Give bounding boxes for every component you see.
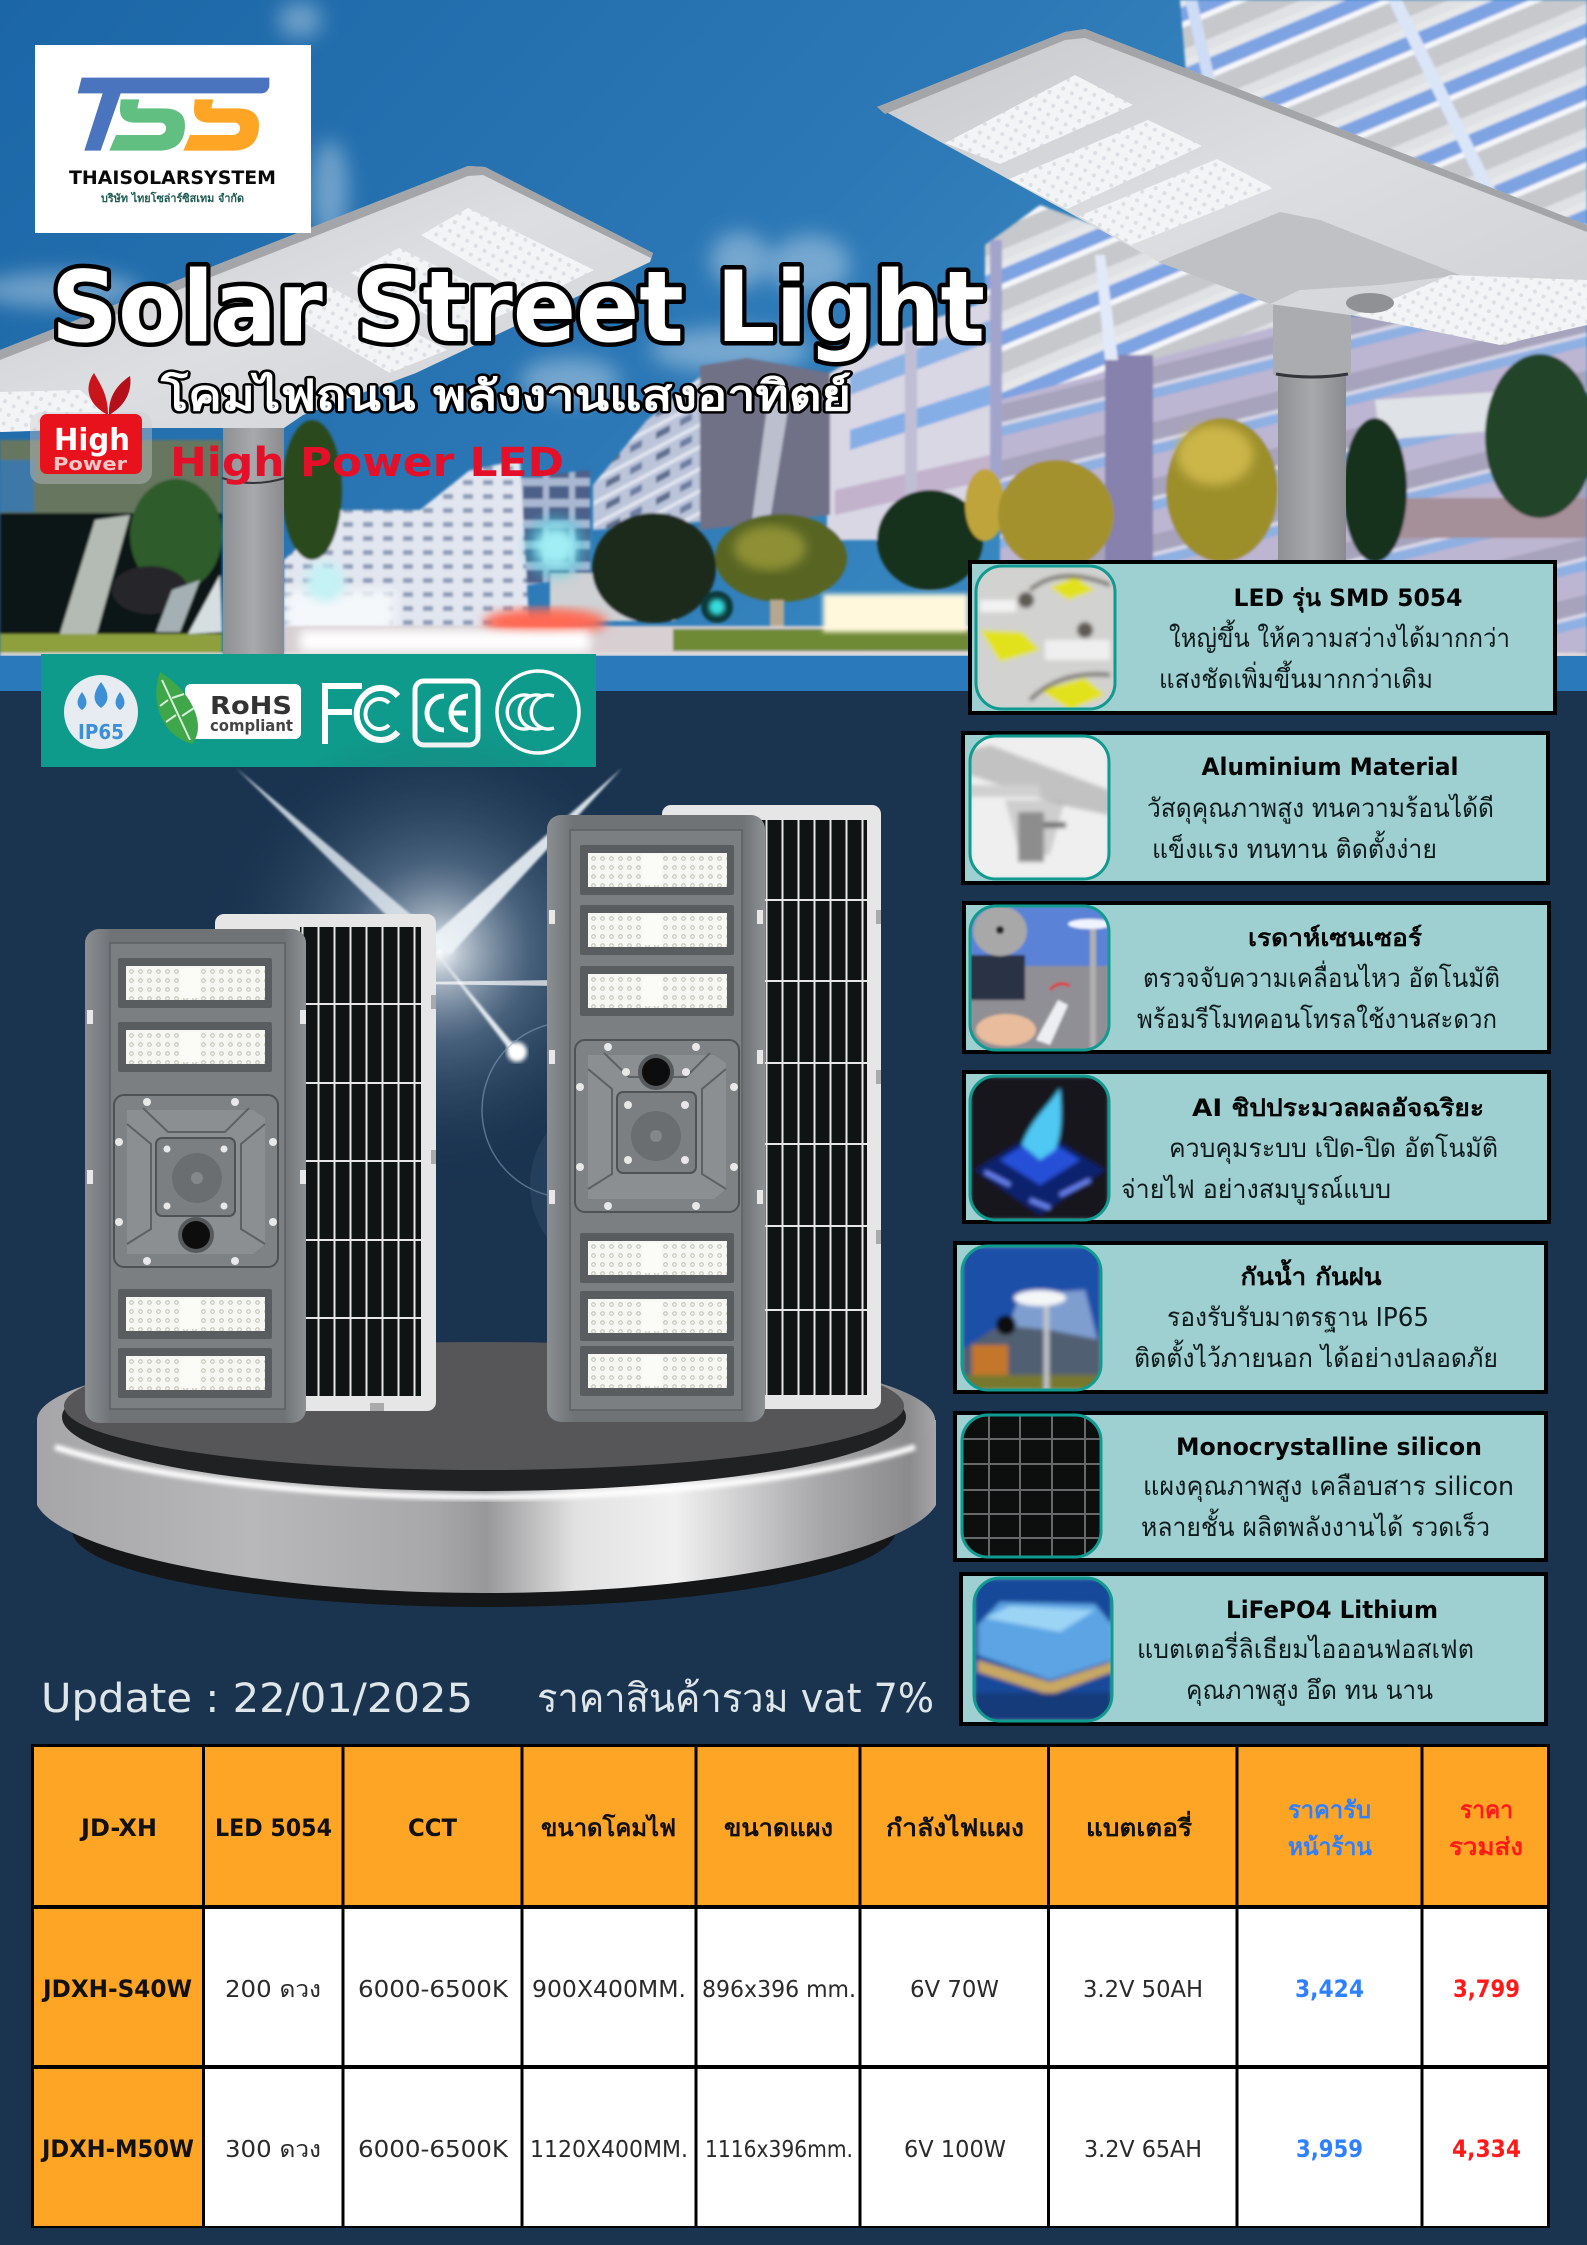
balcony building left of tower — [827, 240, 1002, 540]
table row: JDXH-S40W — [41, 1975, 1520, 2003]
table row: JDXH-M50W: 6000-6500K — [358, 2137, 509, 2163]
badge word high: High — [54, 423, 130, 458]
icon: ce mark — [415, 681, 478, 745]
thumbnail: solar cell grid — [962, 1415, 1101, 1557]
icon: ccc mark — [497, 671, 579, 753]
logo company name: THAISOLARSYSTEM — [69, 167, 276, 189]
upper tower behind right lamp — [1180, 0, 1587, 240]
feature line 1: ตรวจจับความเคลื่อนไหว อัตโนมัติ — [1143, 960, 1500, 994]
feature title: LED รุ่น SMD 5054 — [1234, 584, 1462, 614]
table row: JDXH-S40W: 896x396 mm. — [702, 1977, 856, 2003]
logo card — [35, 45, 311, 233]
panel: waterproof — [955, 1243, 1546, 1392]
lower lilac floors — [1000, 255, 1587, 660]
right product: solar panel — [662, 805, 881, 1409]
table header: หน้าร้าน — [1288, 1833, 1373, 1861]
logo thai name: บริษัท ไทยโซล่าร์ซิสเทม จำกัด — [101, 191, 244, 205]
table row: JDXH-M50W: JDXH-M50W — [40, 2135, 194, 2163]
panel: radar sensor — [964, 903, 1549, 1052]
table header: CCT — [408, 1814, 458, 1842]
feature line 2: ติดตั้งไว้ภายนอก ได้อย่างปลอดภัย — [1134, 1339, 1498, 1374]
title: Solar Street Light — [51, 251, 985, 365]
table row: JDXH-S40W: 6000-6500K — [358, 1977, 509, 2003]
table row: JDXH-S40W: JDXH-S40W — [41, 1975, 192, 2003]
table header: ขนาดแผง — [724, 1814, 833, 1842]
right product: lamp body — [547, 815, 765, 1422]
table header: แบตเตอรี่ — [1086, 1810, 1192, 1842]
feature line 1: แบตเตอรี่ลิเธียมไอออนฟอสเฟต — [1137, 1631, 1474, 1665]
feature title: เรดาห์เซนเซอร์ — [1248, 924, 1422, 952]
table header: ขนาดโคมไฟ — [541, 1813, 676, 1842]
panel: led smd 5054 — [970, 562, 1555, 713]
feature title: Aluminium Material — [1202, 753, 1458, 781]
mounting plate — [575, 1040, 739, 1212]
feature line 2: แสงชัดเพิ่มขึ้นมากกว่าเดิม — [1159, 660, 1433, 695]
icon: rohs compliant — [156, 672, 301, 744]
table header: ราคา — [1460, 1796, 1513, 1824]
table row: JDXH-M50W: 3,959 — [1296, 2135, 1363, 2163]
feature line 2: พร้อมรีโมทคอนโทรลใช้งานสะดวก — [1137, 1004, 1497, 1035]
high power led label: High Power LED — [170, 440, 564, 486]
icon: ip65: IP65 — [78, 720, 124, 744]
far white buildings — [284, 460, 675, 654]
table row: JDXH-S40W: 6V 70W — [910, 1977, 999, 2003]
table row: JDXH-S40W: 3,424 — [1295, 1975, 1364, 2003]
thumbnail: lamp at night — [962, 1246, 1101, 1390]
table row: JDXH-S40W: 3.2V 50AH — [1083, 1977, 1203, 2003]
panel: monocrystalline silicon — [955, 1413, 1546, 1560]
table row: JDXH-M50W: 1116x396mm. — [705, 2137, 853, 2163]
feature line 1: แผงคุณภาพสูง เคลือบสาร silicon — [1143, 1472, 1514, 1502]
feature line 2: คุณภาพสูง อึด ทน นาน — [1186, 1676, 1433, 1706]
feature line 2: จ่ายไฟ อย่างสมบูรณ์แบบ — [1121, 1174, 1391, 1205]
blue band below photo — [0, 656, 1587, 691]
badge word power: Power — [53, 454, 127, 475]
table header: LED 5054 — [215, 1814, 332, 1842]
price table — [31, 1744, 1550, 2228]
table header: JD-XH — [79, 1814, 157, 1842]
left solar street lamp — [0, 166, 653, 655]
mid building — [593, 358, 830, 530]
balcony block under the right lamp — [983, 204, 1273, 400]
thumbnail: battery pack — [974, 1578, 1112, 1721]
left product: lamp body — [85, 929, 306, 1423]
thumbnail: radar sensor and remote — [970, 906, 1112, 1050]
feature title: กันน้ำ กันฝน — [1240, 1258, 1382, 1291]
certification band — [41, 654, 596, 767]
panel: ai chip — [964, 1072, 1549, 1222]
left product: solar panel — [215, 914, 436, 1411]
vat note: ราคาสินค้ารวม vat 7% — [537, 1676, 934, 1722]
icon: fc mark — [325, 686, 398, 744]
panel: lifepo4 lithium — [961, 1574, 1546, 1724]
update date: Update : 22/01/2025 — [41, 1676, 473, 1722]
feature line 2: แข็งแรง ทนทาน ติดตั้งง่าย — [1152, 830, 1437, 865]
thumbnail: led chips — [976, 566, 1115, 710]
feature line 1: รองรับรับมาตรฐาน IP65 — [1167, 1303, 1429, 1333]
table header: รวมส่ง — [1449, 1833, 1523, 1861]
table row: JDXH-S40W: 3,799 — [1453, 1975, 1520, 2003]
table header: ราคารับ — [1288, 1796, 1371, 1824]
icon: rohs compliant: RoHS — [210, 691, 292, 720]
table row: JDXH-S40W: 900X400MM. — [532, 1977, 686, 2003]
hero photo: street scene with solar street lamps — [0, 0, 1587, 660]
table header: กำลังไฟแผง — [886, 1813, 1024, 1842]
icon: rohs compliant: compliant — [210, 716, 293, 735]
panel: aluminium material — [963, 733, 1548, 883]
right solar street lamp — [877, 29, 1587, 565]
table row: JDXH-M50W: 3.2V 65AH — [1084, 2137, 1202, 2163]
thumbnail: aluminium bracket — [970, 736, 1109, 879]
led modules — [580, 845, 734, 1396]
table row: JDXH-M50W — [40, 2135, 1521, 2163]
lens flare glow — [209, 721, 710, 1275]
table row: JDXH-S40W: 200 ดวง — [225, 1977, 321, 2003]
street lights glow — [0, 515, 1587, 656]
logo mark TSS — [78, 78, 269, 151]
trees and lower left greenery — [0, 354, 1587, 656]
feature title: LiFePO4 Lithium — [1226, 1596, 1438, 1624]
feature line 1: ใหญ่ขึ้น ให้ความสว่างได้มากกว่า — [1169, 619, 1510, 654]
feature line 2: หลายชั้น ผลิตพลังงานได้ รวดเร็ว — [1141, 1508, 1490, 1543]
mounting plate — [114, 1095, 278, 1267]
feature title: Monocrystalline silicon — [1176, 1433, 1482, 1461]
far building grid — [519, 469, 593, 587]
feature title: AI ชิปประมวลผลอัจฉริยะ — [1192, 1094, 1484, 1122]
table row: JDXH-M50W: 4,334 — [1452, 2135, 1521, 2163]
thumbnail: ai chip — [970, 1076, 1109, 1220]
high power badge — [30, 373, 152, 484]
icon: ip65 — [64, 675, 138, 749]
table row: JDXH-M50W: 300 ดวง — [225, 2137, 321, 2163]
table header — [79, 1796, 1523, 1861]
platform — [37, 1342, 936, 1607]
feature line 1: วัสดุคุณภาพสูง ทนความร้อนได้ดี — [1147, 793, 1494, 824]
thai subtitle: โคมไฟถนน พลังงานแสงอาทิตย์ — [160, 371, 851, 420]
feature line 1: ควบคุมระบบ เปิด-ปิด อัตโนมัติ — [1169, 1133, 1498, 1164]
table row: JDXH-M50W: 1120X400MM. — [530, 2137, 688, 2163]
led modules — [118, 958, 272, 1398]
table row: JDXH-M50W: 6V 100W — [904, 2137, 1006, 2163]
